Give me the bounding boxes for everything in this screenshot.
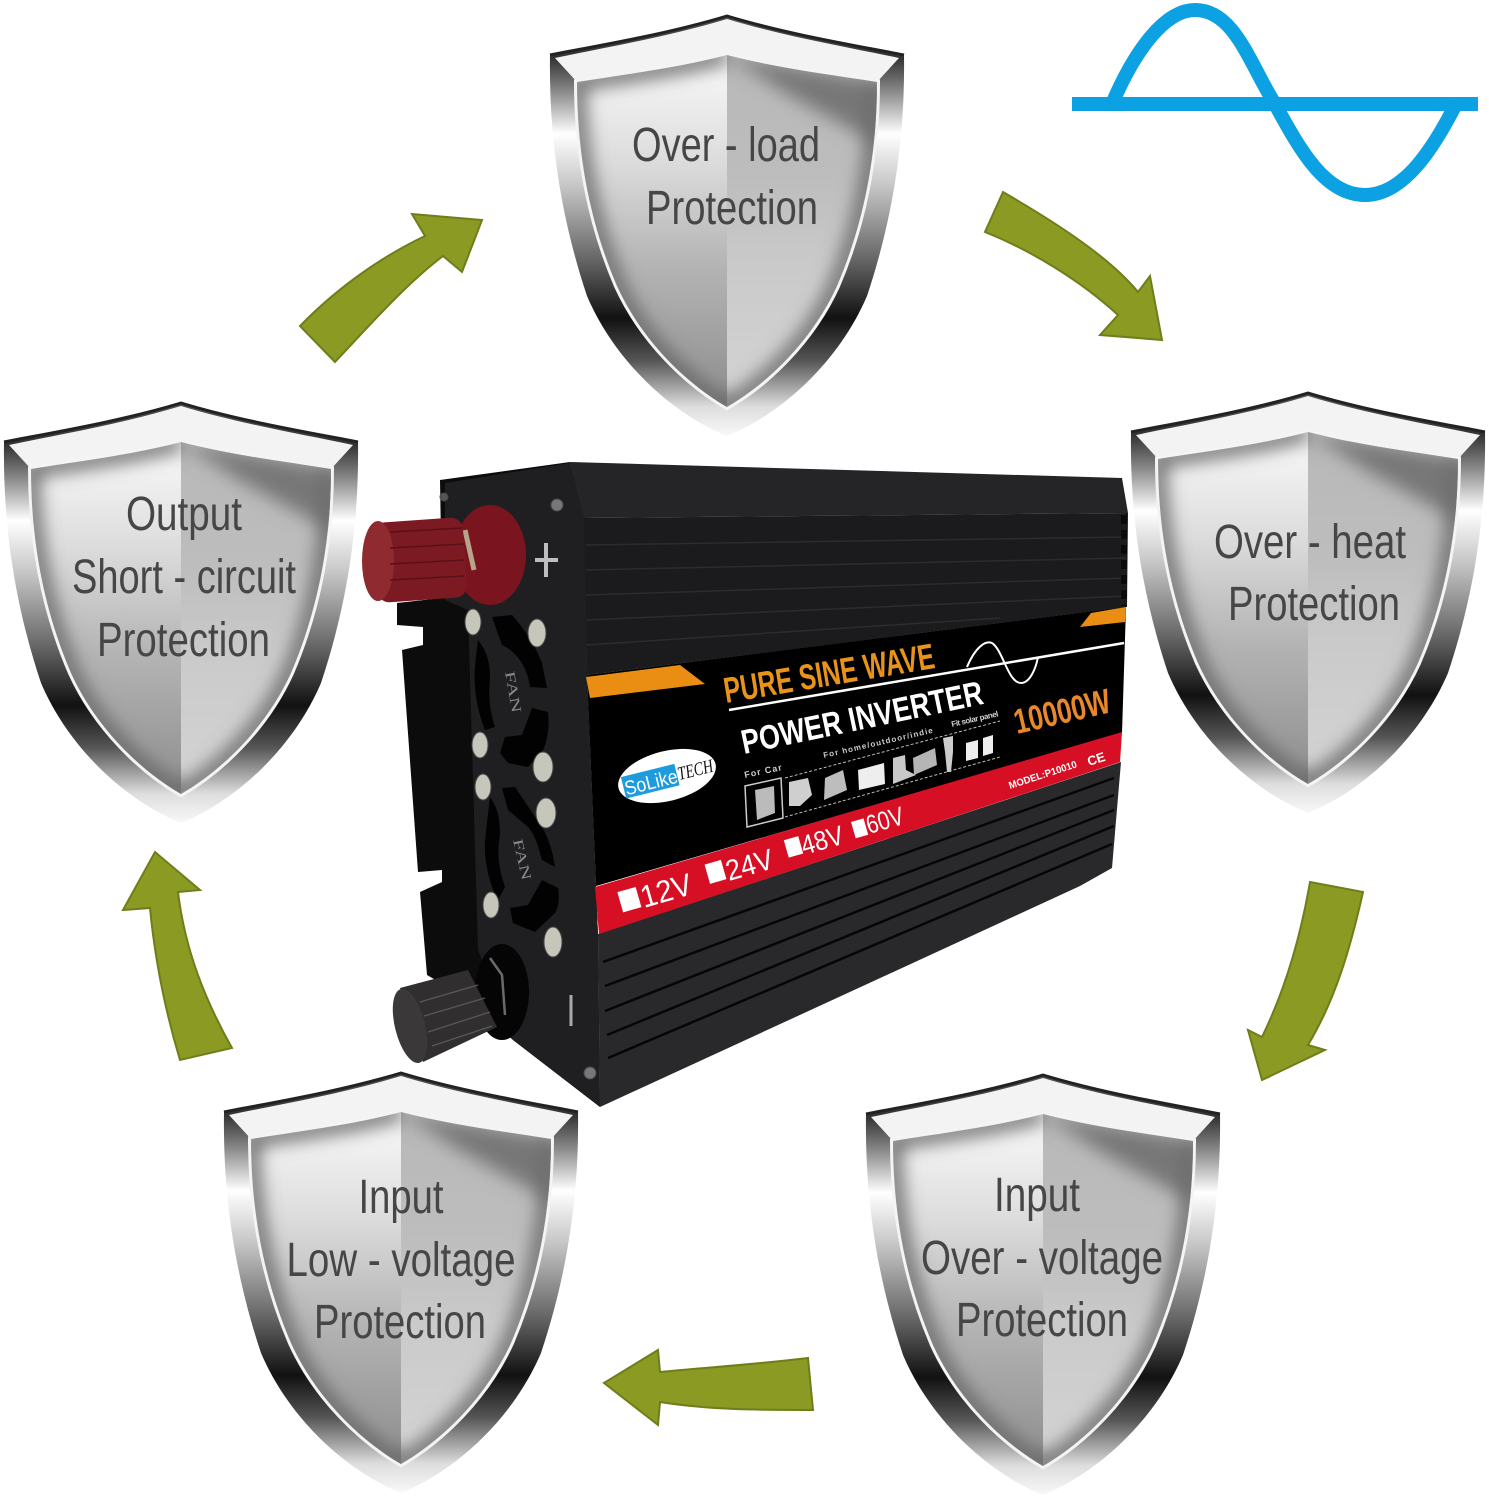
shield: over-load protection: Over - load: [632, 119, 820, 172]
shield: over-load protection: [550, 16, 904, 436]
voltage options: 60V: [862, 800, 908, 840]
arrow: output short-circuit to over-load: [300, 214, 482, 362]
orange stripe left: [586, 665, 705, 698]
inverter lower fins: [603, 778, 1114, 1058]
arrow: input low-voltage to output short-circuit: [123, 852, 232, 1060]
power inverter product: [362, 462, 1128, 1107]
inverter end panel: [445, 463, 600, 1107]
inverter mounting plate and end silhouette: [397, 462, 600, 1107]
inverter upper grooves: [586, 537, 1126, 645]
logo: solike tech: TECH: [675, 756, 716, 785]
shield: input over-voltage protection: Input: [994, 1169, 1080, 1222]
shield: input low-voltage protection: [224, 1073, 578, 1493]
shield: over-load protection: Protection: [646, 182, 818, 235]
shield: output short-circuit protection: Short - circuit: [72, 551, 296, 604]
shield: input over-voltage protection: Protection: [956, 1294, 1128, 1347]
plus sign: [535, 543, 558, 577]
logo: solike tech: [612, 740, 722, 812]
cooling fans: FAN: [509, 838, 533, 882]
orange stripe right: [1080, 607, 1126, 627]
shield: input low-voltage protection: Input: [358, 1171, 444, 1224]
shield: output short-circuit protection: Output: [126, 488, 242, 541]
label: fit solar: Fit solar panel: [950, 709, 999, 729]
shield: over-heat protection: Protection: [1228, 578, 1400, 631]
appliance icons row: [745, 721, 1000, 827]
minus sign: [570, 995, 572, 1026]
heading: power inverter: POWER INVERTER: [738, 674, 986, 762]
shield: input low-voltage protection: Low - voltage: [286, 1234, 516, 1287]
label divider line: [729, 643, 1124, 710]
voltage options: [617, 800, 908, 915]
inverter lower finned face: [598, 762, 1121, 1107]
heading: pure sine wave: PURE SINE WAVE: [721, 635, 937, 711]
fan screws: [440, 493, 596, 1079]
voltage options: 12V: [636, 867, 696, 915]
negative black terminal: [386, 944, 529, 1067]
certification marks: CE: [1085, 749, 1107, 769]
label: for car: For Car: [743, 762, 783, 780]
wattage: 10000W: 10000W: [1010, 682, 1114, 742]
voltage options: 48V: [797, 820, 847, 861]
shield: over-heat protection: [1131, 393, 1485, 813]
voltage options: 24V: [722, 844, 778, 888]
sine wave icon: [1072, 10, 1478, 195]
red voltage band: [595, 732, 1122, 934]
logo: solike tech: SoLike: [622, 766, 680, 800]
shield: output short-circuit protection: Protection: [97, 614, 270, 667]
positive red terminal: [362, 505, 526, 605]
inverter top chamfer: [570, 462, 1128, 518]
arrow: input over-voltage to input low-voltage: [604, 1350, 813, 1425]
label sine wave: [967, 642, 1038, 683]
label panel: black: [587, 607, 1126, 886]
cooling fans: FAN: [501, 670, 523, 714]
model number: MODEL:P10010: [1008, 759, 1079, 792]
label: for home: For home/outdoor/indie: [822, 726, 934, 760]
shield: input over-voltage protection: [866, 1075, 1220, 1495]
shield: output short-circuit protection: [4, 403, 358, 823]
shield: input low-voltage protection: Protection: [314, 1296, 486, 1349]
shield: over-heat protection: Over - heat: [1214, 516, 1406, 569]
shield: input over-voltage protection: Over - voltage: [921, 1232, 1163, 1285]
arrow: over-load to over-heat: [985, 192, 1162, 340]
inverter right edge teeth: [1121, 515, 1127, 606]
cooling fans: [475, 615, 559, 932]
arrow: over-heat to input over-voltage: [1248, 882, 1363, 1080]
inverter upper grooved face: [584, 513, 1128, 675]
